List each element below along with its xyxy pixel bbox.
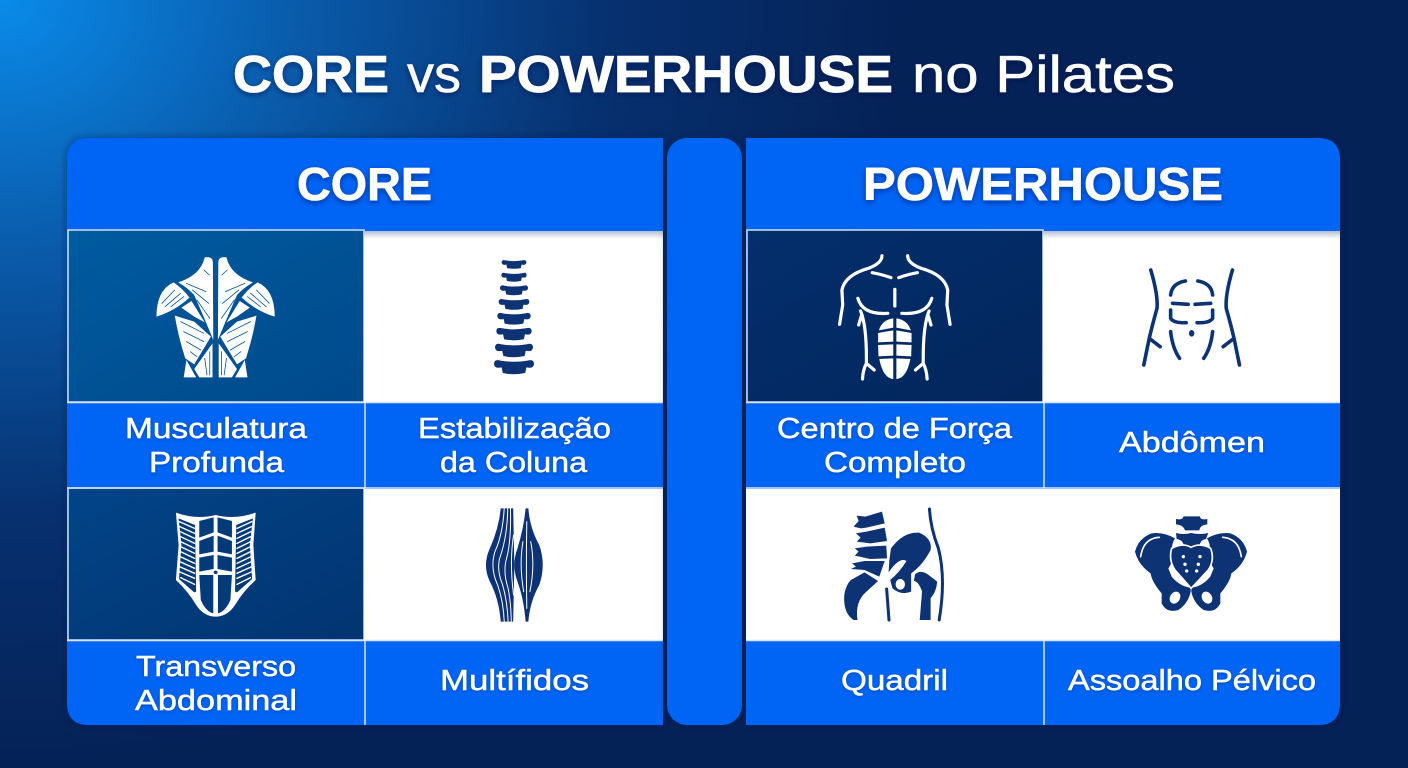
title: vs (407, 46, 461, 104)
label: transverso abdominal (135, 651, 297, 717)
icon: back muscles (156, 257, 275, 377)
icon: pelvis (1135, 516, 1247, 611)
label: centro de força completo: Centro de Força (777, 413, 1013, 445)
cell: quadril and assoalho pélvico white row (746, 489, 1340, 640)
label: centro de força completo (777, 413, 1013, 479)
icon: spine (494, 260, 534, 374)
label: transverso abdominal: Transverso (136, 651, 296, 683)
cell: transverso abdominal (68, 488, 364, 640)
label: transverso abdominal: Abdominal (135, 685, 297, 717)
heading: core: CORE (297, 158, 432, 210)
icon: hip with spine (844, 509, 942, 620)
cell: musculatura profunda (68, 230, 364, 402)
cell: estabilização da coluna (364, 231, 663, 402)
title: CORE (233, 46, 389, 104)
powerhouse panel base (746, 138, 1340, 725)
center divider pill (667, 138, 742, 725)
label: multífidos: Multífidos (440, 665, 589, 697)
icon: torso (840, 256, 950, 379)
label: estabilização da coluna (418, 413, 611, 479)
cell: centro de força completo (747, 230, 1043, 402)
cell: multífidos (364, 489, 663, 640)
icon: abdomen outline (1144, 270, 1239, 365)
icon: transverse abdominis (176, 513, 256, 617)
heading: powerhouse: POWERHOUSE (863, 158, 1223, 210)
icon: multifidus muscle (486, 508, 543, 622)
panel: core (67, 138, 663, 725)
title: no Pilates (912, 46, 1175, 104)
label: musculatura profunda (125, 413, 308, 479)
label: assoalho pélvico: Assoalho Pélvico (1068, 665, 1316, 697)
title: POWERHOUSE (479, 46, 893, 104)
label: estabilização da coluna: Estabilização (418, 413, 611, 445)
label: abdômen: Abdômen (1119, 427, 1265, 459)
label: musculatura profunda: Musculatura (125, 413, 308, 445)
panel: powerhouse (746, 138, 1340, 725)
title (233, 46, 1175, 104)
label: centro de força completo: Completo (824, 447, 966, 479)
core panel base (67, 138, 663, 725)
cell: abdômen (1043, 231, 1340, 402)
label: estabilização da coluna: da Coluna (440, 447, 588, 479)
label: musculatura profunda: Profunda (149, 447, 285, 479)
label: quadril: Quadril (841, 665, 948, 697)
